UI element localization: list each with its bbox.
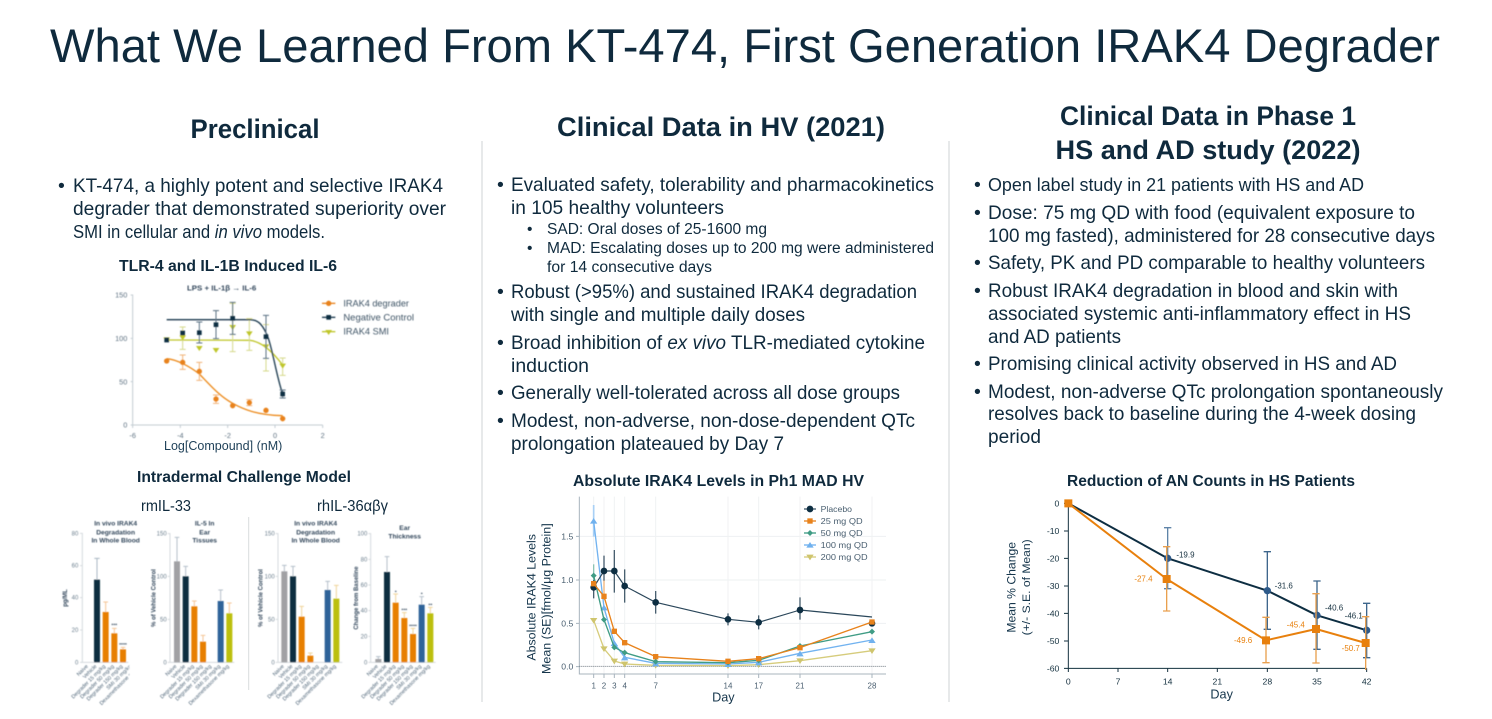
line chart: AN count reduction: -45.4 — [1287, 620, 1305, 629]
bar chart: rmIL-33 degradation: Vehicle — [82, 664, 98, 680]
line chart: IL-6 dose response: 2 — [321, 431, 325, 440]
line chart: IRAK4 levels over days: 100 mg QD — [821, 540, 868, 550]
text block: HV bullets: induction — [511, 355, 589, 377]
text block: HV bullets: • — [527, 240, 532, 257]
text block: HV bullets: SAD: Oral doses of 25-1600 mg — [547, 221, 767, 238]
line chart: IL-6 dose response: 0 — [273, 431, 277, 440]
line chart: AN count reduction: (+/- S.E. of Mean) — [1021, 539, 1033, 635]
line chart: IRAK4 levels over days: 28 — [868, 682, 877, 691]
text block: HV bullets: • — [497, 382, 504, 404]
bar chart: rmIL-33 degradation: *** — [111, 623, 117, 629]
bar chart: ear thickness: *** — [401, 608, 407, 614]
line chart: IL-6 dose response: -4 — [177, 431, 184, 440]
line chart: AN count reduction: -31.6 — [1275, 582, 1293, 591]
bar chart: ear thickness: Change from Baseline — [354, 566, 360, 630]
bar chart: ear thickness: Dexamethasone mg/kg — [389, 664, 432, 707]
bar chart: rhIL-36 degradation: 50 — [268, 617, 275, 623]
line chart: IRAK4 levels over days — [524, 497, 886, 705]
bar chart: ear thickness: Vehicle — [372, 664, 388, 680]
bar chart: IL-5 ear tissues: 50 — [160, 617, 167, 623]
line chart: IL-6 dose response: -2 — [224, 431, 231, 440]
line chart: IRAK4 levels over days: 25 mg QD — [821, 516, 863, 526]
bar chart: rmIL-33 degradation: Degrader 15 mg/kg — [71, 664, 107, 700]
line chart: AN count reduction — [1004, 498, 1372, 701]
bar chart: ear thickness: Degrader 50 mg/kg — [369, 664, 406, 700]
text block: phase 1 bullets: and AD patients — [988, 326, 1121, 348]
bar chart: IL-5 ear tissues: Degrader 50 mg/kg — [168, 664, 204, 700]
bar chart: IL-5 ear tissues: IL-5 In — [195, 521, 214, 528]
text block: preclinical bullets: KT-474, a highly potent and selective IRAK4 — [73, 175, 443, 197]
heading: phase 1: HS and AD study (2022) — [1056, 135, 1360, 165]
bar chart: IL-5 ear tissues: 100 — [157, 574, 167, 580]
bar chart: rmIL-33 degradation: Naive — [76, 664, 90, 678]
bar chart: rmIL-33 degradation: Degrader 50 mg/kg — [79, 664, 116, 700]
text block: phase 1 bullets: Safety, PK and PD comparable to healthy volunteers — [988, 252, 1425, 274]
line chart: AN count reduction: -50 — [1047, 636, 1060, 646]
text block: HV bullets: • — [527, 221, 532, 238]
bar chart: ear thickness: 20 — [361, 634, 368, 640]
line chart: AN count reduction: 7 — [1116, 677, 1121, 687]
bar chart: ear thickness: Thickness — [388, 534, 421, 541]
line chart: AN count reduction: 21 — [1213, 677, 1222, 687]
text block: phase 1 bullets: • — [974, 353, 981, 375]
text block: phase 1 bullets: • — [974, 280, 981, 302]
bar chart: rmIL-33 degradation: 40 — [72, 596, 79, 602]
bar chart: IL-5 ear tissues: SMI 30 mg/kg — [195, 664, 222, 691]
bar chart: rhIL-36 degradation: Naive — [272, 664, 286, 678]
bar chart: rhIL-36 degradation: SMI 30 mg/kg — [302, 664, 329, 691]
text block: phase 1 bullets: Dose: 75 mg QD with food (equivalent exposure to — [988, 202, 1415, 224]
text block: preclinical bullets — [58, 175, 446, 242]
line chart: IRAK4 levels over days: 3 — [612, 682, 617, 691]
line chart: IRAK4 levels over days: 2 — [602, 682, 607, 691]
line chart: IL-6 dose response: 100 — [115, 334, 127, 343]
bar chart: IL-5 ear tissues: 0 — [163, 660, 167, 666]
line chart: AN count reduction: -20 — [1047, 553, 1060, 563]
bar chart: rhIL-36 degradation: Dexamethasone mg/kg — [295, 664, 338, 707]
bar chart: IL-5 ear tissues: Degrader 150 mg/kg — [174, 664, 213, 702]
label: rmIL-33: rmIL-33 — [141, 498, 191, 515]
text block: phase 1 bullets: • — [974, 202, 981, 224]
bar chart: rhIL-36 degradation: Degrader 50 mg/kg — [275, 664, 312, 700]
bar chart: ear thickness: Degrader 15 mg/kg — [361, 664, 397, 700]
bar chart: IL-5 ear tissues: % of Vehicle Control — [151, 569, 157, 627]
text block: preclinical bullets: degrader that demonstrated superiority over — [73, 198, 446, 220]
bar chart: rhIL-36 degradation: Degrader 150 mg/kg — [282, 664, 320, 702]
text block: HV bullets — [497, 174, 934, 455]
line chart: IL-6 dose response: Negative Control — [343, 312, 414, 322]
heading: phase 1 — [1056, 101, 1360, 165]
text block: phase 1 bullets: associated systemic anti-inflammatory effect in HS — [988, 303, 1411, 325]
line chart: IRAK4 levels over days: 0.0 — [561, 662, 574, 672]
bar chart: rhIL-36 degradation: Degrader 15 mg/kg — [267, 664, 303, 700]
bar chart: IL-5 ear tissues: Naive — [165, 664, 178, 678]
bar chart: rmIL-33 degradation: SMI 30 mg/kg — [106, 664, 133, 691]
panel: preclinical — [58, 114, 446, 707]
line chart: IRAK4 levels over days: 50 mg QD — [821, 528, 863, 538]
heading: phase 1: Clinical Data in Phase 1 — [1060, 101, 1356, 131]
line chart: AN count reduction: -30 — [1047, 581, 1060, 591]
divider left — [481, 141, 483, 702]
chart heading: intradermal: Intradermal Challenge Model — [137, 469, 351, 486]
bar chart: rmIL-33 degradation: **** — [119, 642, 127, 648]
text block: phase 1 bullets: • — [974, 381, 981, 403]
bar chart: IL-5 ear tissues: Dexamethasone mg/kg — [188, 664, 231, 707]
bar chart: rhIL-36 degradation: Degradation — [296, 529, 335, 536]
text block: phase 1 bullets: Promising clinical activity observed in HS and AD — [988, 353, 1397, 375]
bar chart: IL-5 ear tissues: 150 — [157, 532, 167, 538]
line chart: IL-6 dose response: LPS + IL-1β → IL-6 — [187, 284, 256, 293]
bar chart: ear thickness: 100 — [357, 532, 368, 538]
line chart: AN count reduction: 35 — [1312, 677, 1322, 687]
line chart: AN count reduction: -10 — [1047, 526, 1060, 536]
bar chart: ear thickness: Degrader 150 mg/kg — [376, 664, 414, 702]
bar chart: rmIL-33 degradation: 0 — [75, 660, 79, 666]
line chart: IL-6 dose response: 0 — [123, 421, 127, 430]
text block: HV bullets: in 105 healthy volunteers — [511, 197, 724, 219]
text block: phase 1 bullets: Modest, non-adverse QTc prolongation spontaneously — [988, 381, 1443, 403]
line chart: IL-6 dose response — [115, 284, 414, 453]
line chart: IL-6 dose response: Log[Compound] (nM) — [164, 438, 282, 453]
bar chart: rhIL-36 degradation: Vehicle — [278, 664, 294, 680]
line chart: AN count reduction: Mean % Change — [1004, 542, 1018, 633]
line chart: IRAK4 levels over days: 17 — [754, 682, 764, 691]
line chart: IL-6 dose response: -6 — [129, 431, 136, 440]
line chart: IL-6 dose response: 50 — [119, 377, 127, 386]
text block: phase 1 bullets: period — [988, 426, 1041, 448]
line chart: IRAK4 levels over days: 1.5 — [561, 531, 574, 541]
bar chart: IL-5 ear tissues: Degrader 15 mg/kg — [159, 664, 196, 700]
line chart: IRAK4 levels over days: 1 — [591, 682, 596, 691]
bar chart: ear thickness: **** — [409, 624, 417, 630]
bar chart: ear thickness: 60 — [361, 583, 368, 589]
bar chart: ear thickness — [354, 525, 436, 707]
line chart: AN count reduction: 0 — [1055, 498, 1060, 508]
legend — [804, 507, 816, 511]
bar chart: rmIL-33 degradation: Degradation — [96, 529, 135, 536]
text block: phase 1 bullets: Open label study in 21 patients with HS and AD — [988, 174, 1364, 195]
line chart: AN count reduction: -50.7 — [1342, 644, 1360, 653]
bar chart: ear thickness: 0 — [364, 660, 368, 666]
line chart: IRAK4 levels over days: Absolute IRAK4 Levels — [524, 534, 538, 661]
text block: HV bullets: for 14 consecutive days — [547, 259, 712, 276]
heading: preclinical: Preclinical — [190, 114, 320, 144]
line chart: IRAK4 levels over days: 200 mg QD — [821, 552, 868, 562]
line chart: AN count reduction: -46.1 — [1345, 612, 1363, 621]
bar chart: rhIL-36 degradation: % of Vehicle Control — [259, 569, 265, 627]
line chart: AN count reduction: -40.6 — [1325, 604, 1344, 613]
label: rhIL-36: rhIL-36αβγ — [317, 498, 388, 515]
bar chart: rmIL-33 degradation: 60 — [72, 564, 79, 570]
text block: preclinical bullets: SMI in cellular and in vivo models. — [73, 221, 325, 242]
line chart: IRAK4 levels over days: 4 — [622, 682, 627, 691]
bar chart: ear thickness: 40 — [361, 609, 368, 615]
bar chart: IL-5 ear tissues — [151, 521, 234, 707]
bar chart: ear thickness: 80 — [361, 557, 368, 563]
bar chart: ear thickness: * — [395, 589, 397, 595]
text block: phase 1 bullets: • — [974, 252, 981, 274]
line chart: IRAK4 levels over days: Mean (SE)[fmol/μg Protein] — [540, 523, 554, 674]
line chart: IL-6 dose response: 150 — [115, 291, 127, 300]
text block: phase 1 bullets: 100 mg fasted), administered for 28 consecutive days — [988, 225, 1435, 247]
bar chart: ear thickness: Ear — [399, 525, 410, 532]
text block: HV bullets: • — [497, 174, 504, 196]
line chart: AN count reduction: Day — [1210, 687, 1234, 701]
text block: HV bullets: Robust (>95%) and sustained IRAK4 degradation — [511, 281, 917, 303]
bar chart: rhIL-36 degradation: 150 — [265, 532, 275, 538]
bar chart: ear thickness: * — [421, 592, 423, 598]
text block: HV bullets: Broad inhibition of ex vivo TLR-mediated cytokine — [511, 332, 925, 354]
line chart: AN count reduction: -40 — [1047, 608, 1060, 618]
text block: phase 1 bullets: Robust IRAK4 degradation in blood and skin with — [988, 280, 1398, 302]
title: What We Learned From KT-474, First Generation IRAK4 Degrader — [50, 19, 1440, 72]
chart heading: IRAK4 levels: Absolute IRAK4 Levels in Ph1 MAD HV — [573, 473, 864, 490]
line chart: IRAK4 levels over days: 21 — [796, 682, 805, 691]
series — [591, 505, 596, 537]
text block: phase 1 bullets — [974, 174, 1443, 448]
bar chart: IL-5 ear tissues: Tissues — [192, 538, 217, 545]
bar chart: IL-5 ear tissues: Ear — [199, 529, 210, 536]
bar chart: rmIL-33 degradation — [63, 521, 142, 707]
bar chart: rmIL-33 degradation: Degrader 150 mg/kg — [86, 664, 124, 702]
line chart: IRAK4 levels over days: 1.0 — [561, 575, 574, 585]
line chart: AN count reduction: 0 — [1066, 677, 1071, 687]
bar chart: rmIL-33 degradation: In vivo IRAK4 — [94, 521, 137, 528]
bar chart: rhIL-36 degradation: 100 — [265, 574, 275, 580]
bar chart: rmIL-33 degradation: 20 — [72, 628, 79, 634]
bar chart: rmIL-33 degradation: 80 — [72, 531, 79, 537]
bar chart: IL-5 ear tissues: Vehicle — [171, 664, 187, 680]
bar chart: rhIL-36 degradation — [259, 521, 342, 707]
line chart: IL-6 dose response: IRAK4 degrader — [343, 298, 409, 308]
line chart: AN count reduction: -60 — [1047, 663, 1060, 673]
chart heading: AN counts: Reduction of AN Counts in HS Patients — [1067, 473, 1355, 490]
line chart: IRAK4 levels over days: 14 — [724, 682, 733, 691]
panel: clinical data in HV — [497, 112, 934, 705]
line chart: AN count reduction: -49.6 — [1234, 636, 1253, 645]
bar chart: rhIL-36 degradation: In vivo IRAK4 — [294, 521, 337, 528]
bar chart: ear thickness: ** — [428, 603, 432, 609]
line chart: AN count reduction: -19.9 — [1176, 550, 1195, 559]
text block: HV bullets: • — [497, 410, 504, 432]
bar chart: rmIL-33 degradation: In Whole Blood — [91, 538, 140, 545]
text block: HV bullets: Modest, non-adverse, non-dose-dependent QTc — [511, 410, 915, 432]
chart heading: TLR-4: TLR-4 and IL-1B Induced IL-6 — [119, 258, 337, 275]
line chart: IRAK4 levels over days: Placebo — [821, 504, 852, 514]
text block: HV bullets: Generally well-tolerated across all dose groups — [511, 382, 900, 404]
text block: HV bullets: Evaluated safety, tolerability and pharmacokinetics — [511, 174, 934, 196]
heading: clinical HV: Clinical Data in HV (2021) — [557, 112, 885, 142]
text block: HV bullets: MAD: Escalating doses up to 200 mg were administered — [547, 240, 934, 257]
line chart: AN count reduction: -27.4 — [1134, 575, 1153, 584]
text block: HV bullets: prolongation plateaued by Day 7 — [511, 433, 784, 455]
text block: HV bullets: • — [497, 332, 504, 354]
bar chart: rmIL-33 degradation: Dexamethasone mg/kg — [99, 664, 142, 707]
line chart: AN count reduction: 42 — [1362, 677, 1372, 687]
bar chart: rhIL-36 degradation: 0 — [271, 660, 275, 666]
bar chart: rhIL-36 degradation: In Whole Blood — [291, 538, 340, 545]
text block: HV bullets: with single and multiple daily doses — [510, 304, 805, 326]
text block: preclinical bullets: • — [58, 175, 65, 197]
line chart: IRAK4 levels over days: Day — [712, 691, 735, 705]
bar chart: rmIL-33 degradation: pg/ML — [63, 589, 69, 607]
line chart: IL-6 dose response: IRAK4 SMI — [343, 327, 389, 337]
text block: phase 1 bullets: resolves back to baseline during the 4-week dosing — [988, 403, 1416, 425]
bar chart: ear thickness: SMI 30 mg/kg — [396, 664, 423, 691]
text block: phase 1 bullets: • — [974, 174, 981, 196]
panel: clinical data in phase 1 — [974, 101, 1443, 701]
line chart: IRAK4 levels over days: 0.5 — [561, 618, 574, 628]
bar chart: ear thickness: Naive — [366, 664, 380, 678]
line chart: AN count reduction: 28 — [1263, 677, 1272, 687]
line chart: IRAK4 levels over days: 7 — [653, 682, 658, 691]
text block: HV bullets: • — [497, 281, 504, 303]
line chart: AN count reduction: 14 — [1163, 677, 1173, 687]
